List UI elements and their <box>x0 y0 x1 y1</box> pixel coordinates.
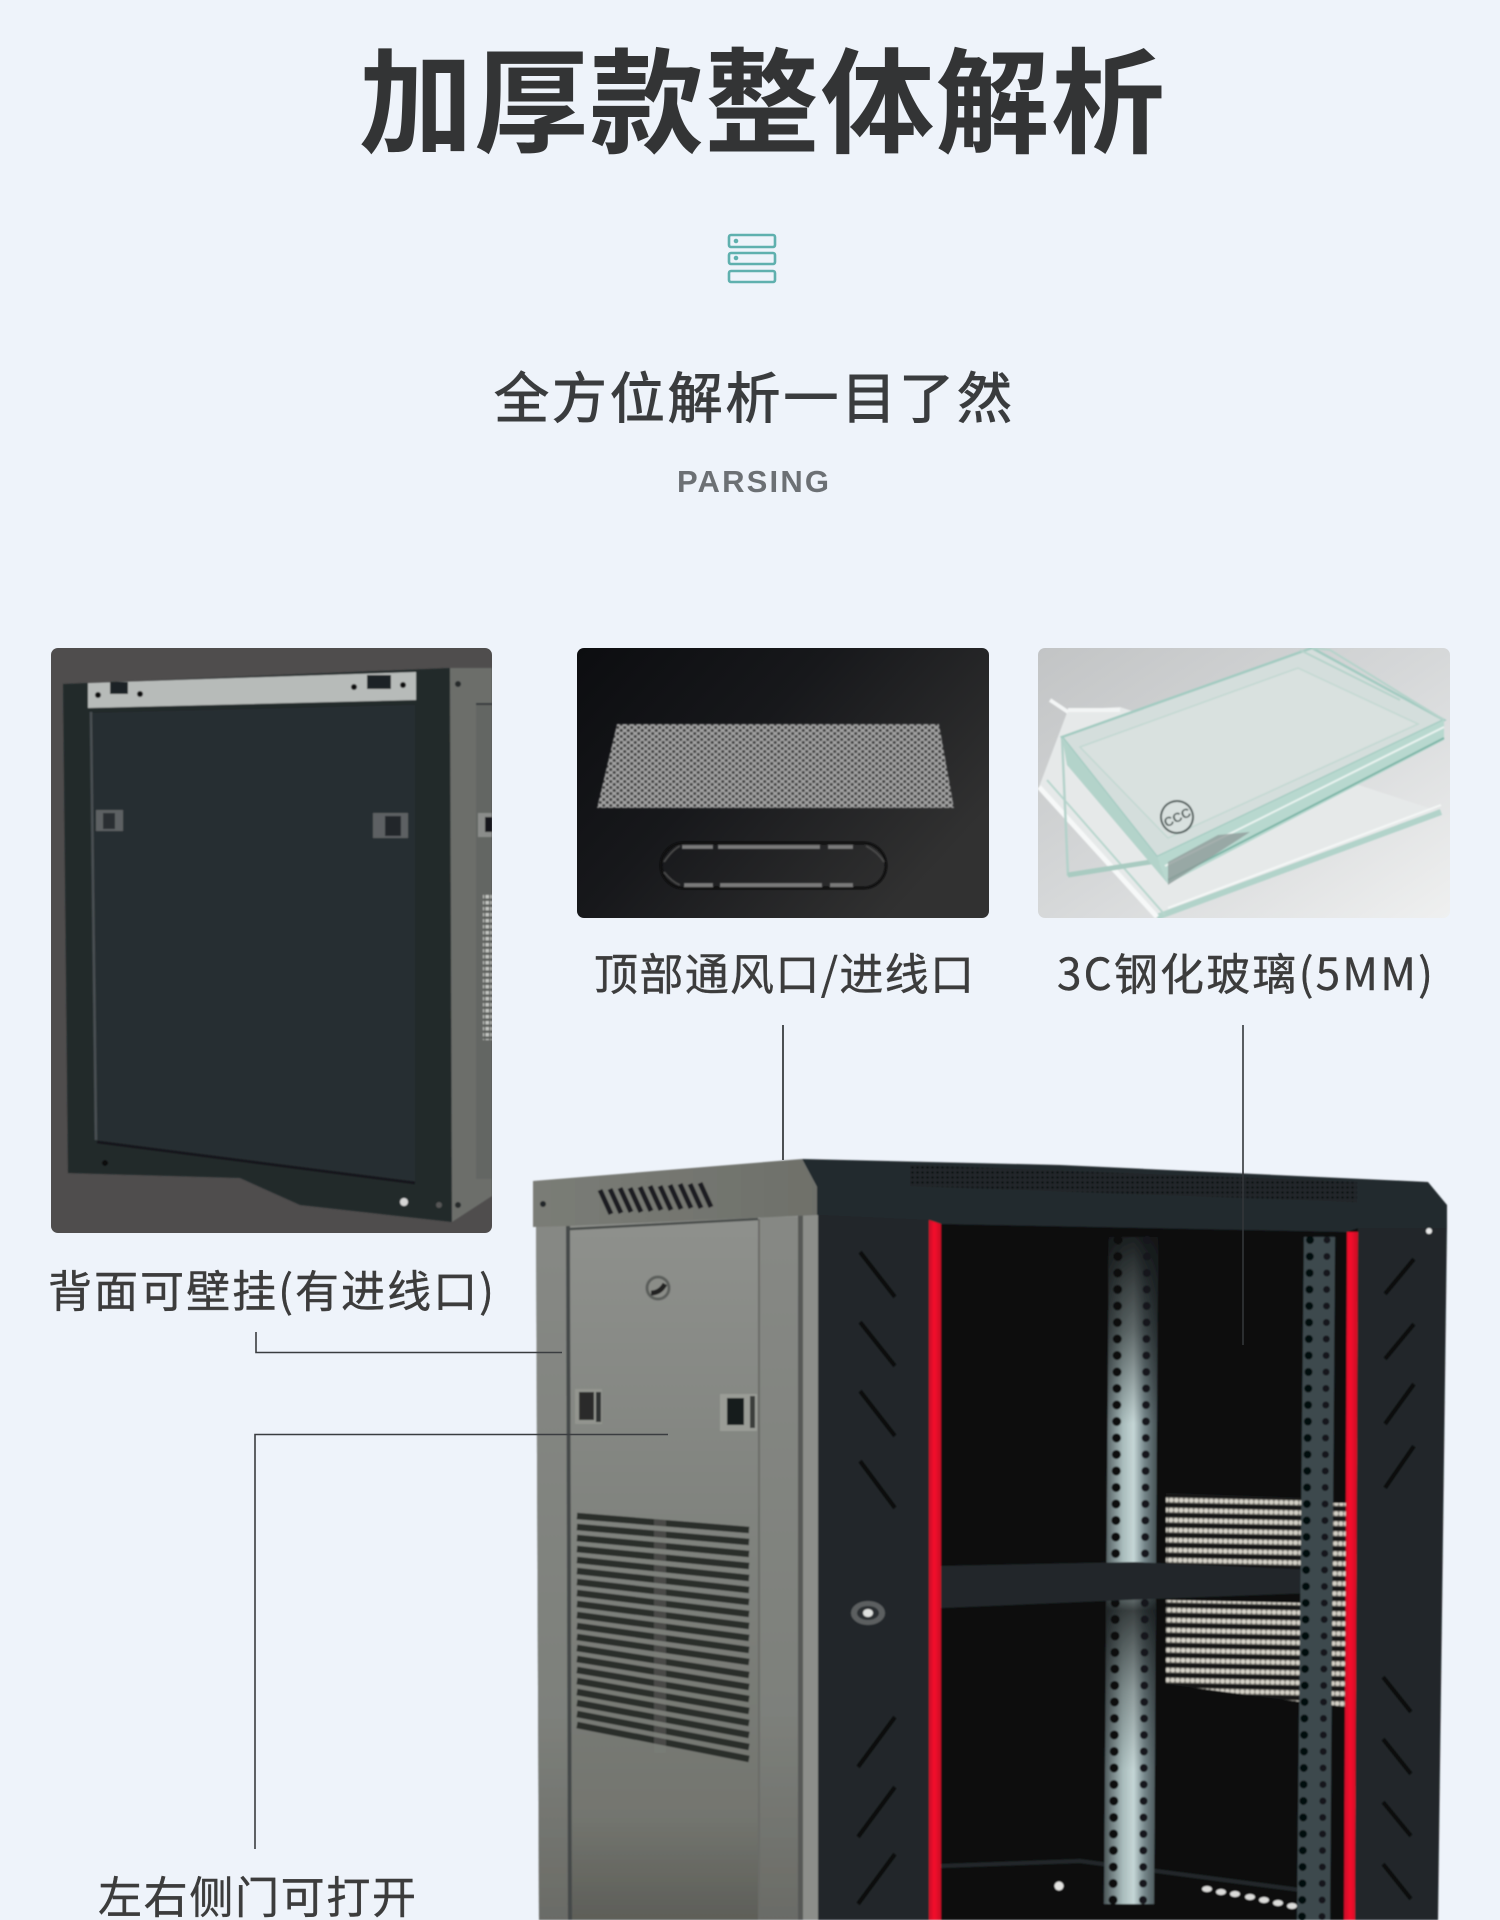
panel: top vent photo <box>577 648 989 918</box>
label: top vent: 顶部通风口/进线口 <box>594 939 974 1003</box>
panel: tempered glass photo <box>1038 648 1450 918</box>
door clips <box>575 1389 602 1424</box>
leader line: tempered glass <box>1242 1025 1244 1345</box>
left post lock <box>851 1601 885 1625</box>
label: rear wall-mount: 背面可壁挂(有进线口) <box>48 1256 494 1320</box>
label: tempered glass: 3C钢化玻璃(5MM) <box>1057 939 1433 1003</box>
perforated rear plate <box>1166 1493 1309 1574</box>
front lid <box>802 1159 1447 1232</box>
mounting bar <box>88 672 416 708</box>
front right post <box>1355 1224 1447 1920</box>
left column <box>536 1225 568 1920</box>
lower glass sheet <box>1040 706 1380 913</box>
side lid <box>533 1159 817 1227</box>
upper glass sheet <box>1062 648 1444 857</box>
subtitle: 全方位解析一目了然 <box>494 354 1012 434</box>
right column <box>760 1861 798 1920</box>
interior <box>925 1212 1360 1920</box>
front left post <box>818 1213 929 1920</box>
clips <box>96 810 123 831</box>
leader line: side doors <box>255 1434 668 1849</box>
leader line: top vent <box>782 1025 784 1160</box>
red door seal: left <box>929 1220 941 1920</box>
icon: server rack <box>729 235 775 282</box>
red door seal: right <box>1344 1232 1358 1920</box>
side body <box>536 1215 818 1920</box>
rear face <box>63 668 452 1222</box>
main cabinet photo <box>533 1159 1447 1920</box>
cable slot <box>661 843 886 888</box>
vent centre seam <box>654 1518 666 1753</box>
lid vents <box>600 1183 711 1214</box>
left rail <box>1104 1237 1158 1904</box>
english subheading: PARSING <box>677 464 829 499</box>
door lock <box>647 1277 669 1299</box>
slanted vents: left post <box>858 1252 895 1904</box>
CCC mark: CCC <box>1161 804 1194 830</box>
side vent rows <box>577 1516 749 1759</box>
right rail <box>1297 1237 1335 1920</box>
side wall <box>450 668 492 1222</box>
mesh vent <box>597 724 954 808</box>
slanted vents: right post <box>1383 1259 1414 1899</box>
title: 加厚款整体解析 <box>359 12 1165 177</box>
CCC mark <box>1159 799 1195 835</box>
leader line: rear wall-mount <box>256 1332 562 1352</box>
shelf <box>941 1562 1311 1608</box>
door panel <box>570 1220 758 1920</box>
panel: rear wall-mount photo <box>51 648 492 1233</box>
inner panel <box>93 705 415 1183</box>
dark backing behind the front frame <box>820 1195 1440 1260</box>
floor fasteners <box>1054 1882 1064 1890</box>
